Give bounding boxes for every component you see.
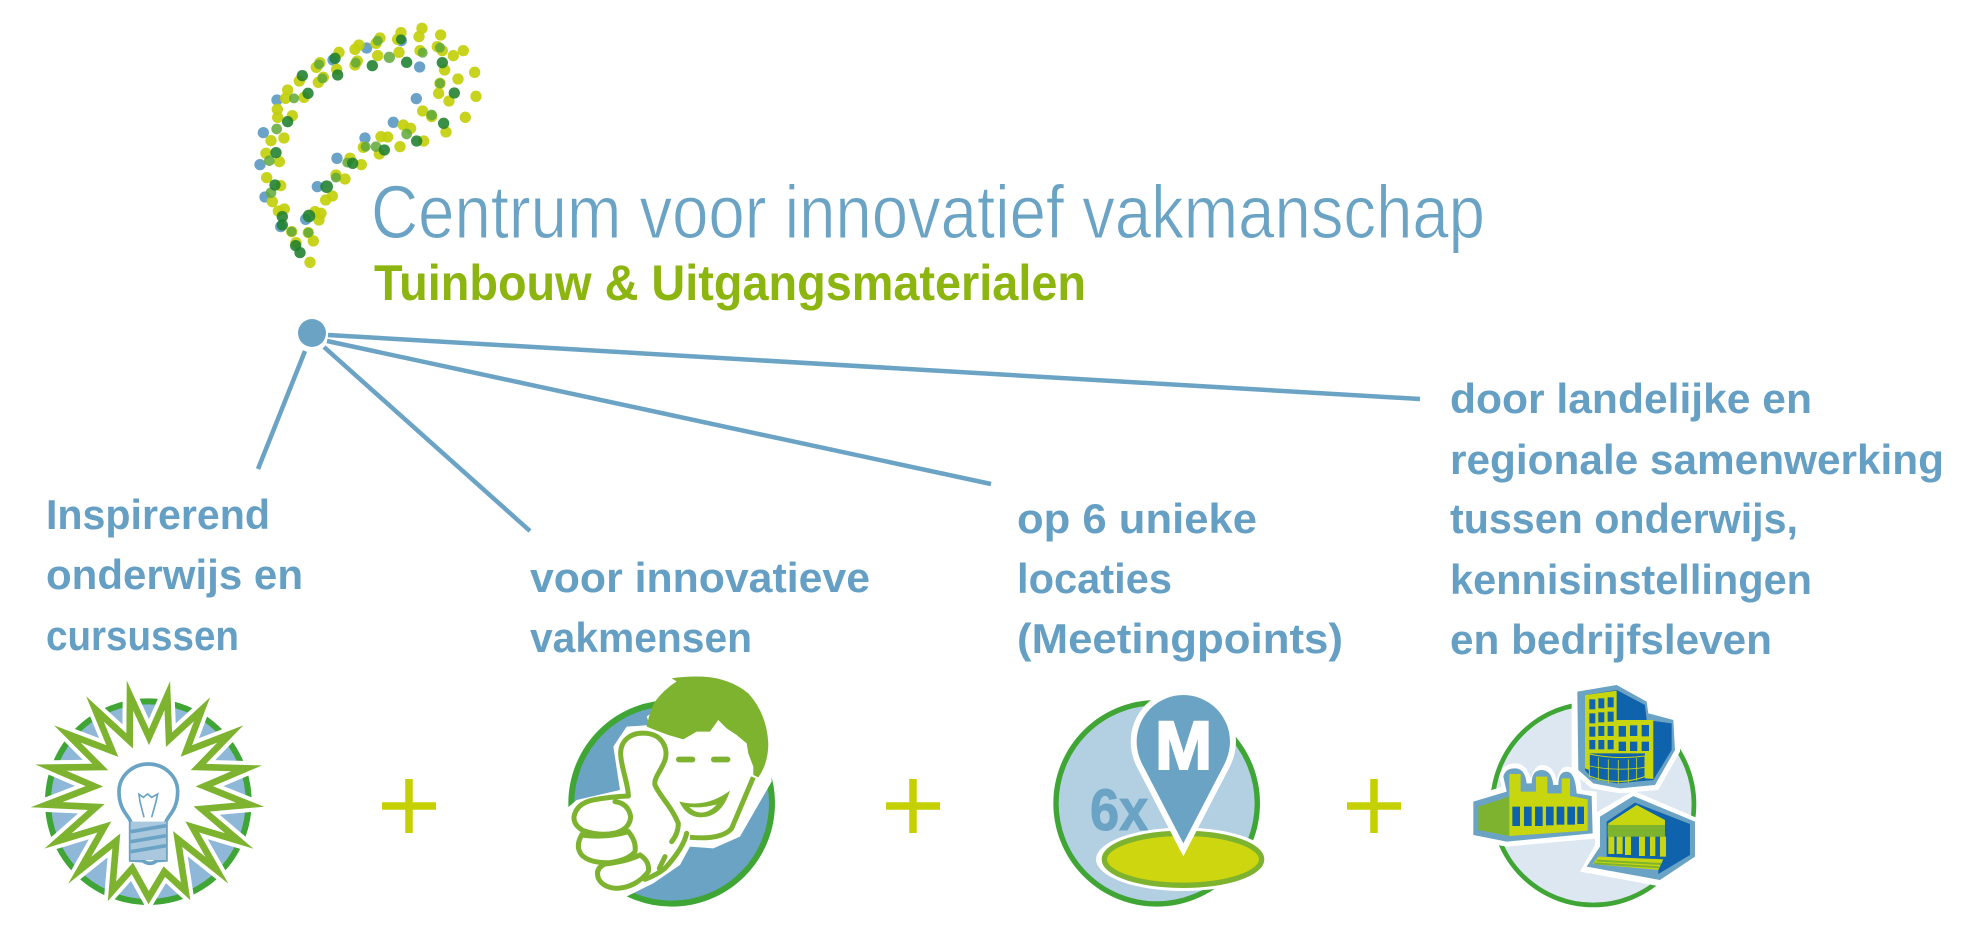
subtitle: Tuinbouw & Uitgangsmaterialen	[374, 255, 1086, 311]
text: inspirerend onderwijs: onderwijs en	[46, 551, 303, 598]
icon: meeting point pin	[1056, 695, 1271, 904]
text: 6 locaties	[1017, 495, 1343, 662]
text: samenwerking: en bedrijfsleven	[1450, 616, 1772, 663]
hub dot	[298, 319, 326, 347]
text: samenwerking: tussen onderwijs,	[1450, 495, 1798, 542]
text: 6 locaties: locaties	[1017, 555, 1172, 602]
icon: meeting point pin: 6x	[1090, 778, 1148, 843]
text: 6 locaties: (Meetingpoints)	[1017, 615, 1343, 662]
icon: thumbs up person	[565, 670, 772, 904]
icon: meeting point pin: M	[1155, 707, 1212, 784]
icon: light bulb with star burst	[47, 696, 250, 902]
text: 6 locaties: op 6 unieke	[1017, 495, 1257, 542]
text: samenwerking	[1450, 375, 1944, 663]
text: inspirerend onderwijs: cursussen	[46, 612, 239, 659]
text: inspirerend onderwijs	[46, 491, 303, 659]
plus sign 2	[886, 779, 940, 833]
text: samenwerking: regionale samenwerking	[1450, 436, 1944, 483]
text: samenwerking: door landelijke en	[1450, 375, 1812, 422]
text: innovatieve vakmensen: voor innovatieve	[530, 554, 870, 601]
text: innovatieve vakmensen	[530, 554, 870, 661]
text: samenwerking: kennisinstellingen	[1450, 556, 1812, 603]
connector lines from hub dot	[258, 335, 1420, 531]
icon: buildings	[1468, 680, 1702, 905]
title: Centrum voor innovatief vakmanschap	[371, 170, 1485, 254]
plus sign 3	[1347, 779, 1401, 833]
logo: leaf of dots	[254, 23, 482, 268]
plus sign 1	[382, 779, 436, 833]
text: inspirerend onderwijs: Inspirerend	[46, 491, 270, 538]
text: innovatieve vakmensen: vakmensen	[530, 614, 752, 661]
